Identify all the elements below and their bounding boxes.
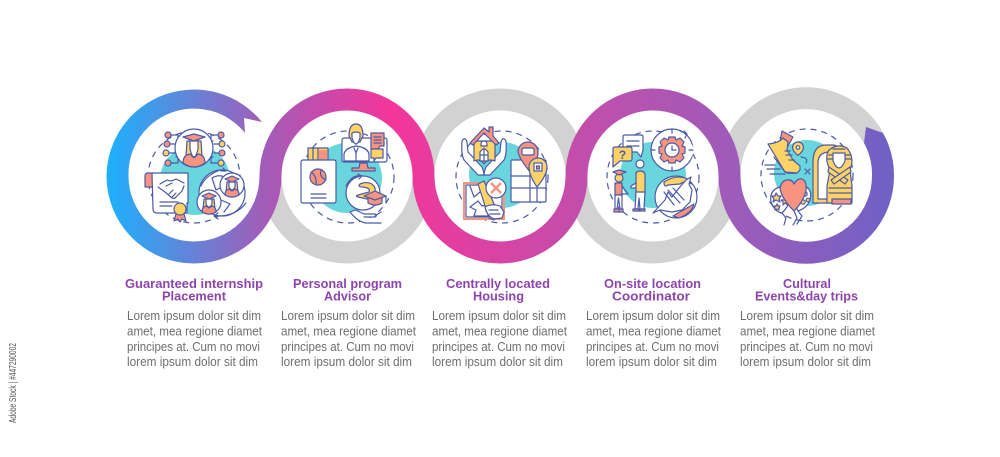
step 2 text: lorem ipsum dolor sit dim [281, 355, 412, 369]
step 3 heading: Centrally located [446, 277, 550, 291]
step 5 heading [755, 277, 858, 304]
step 1 heading [125, 277, 263, 304]
step 3 text: principes at. Cum no movi [432, 340, 565, 354]
step 5 text: lorem ipsum dolor sit dim [740, 355, 871, 369]
step 2 heading [293, 277, 402, 304]
step 2 heading: Advisor [324, 290, 371, 304]
icon: internship placement [145, 129, 246, 223]
step 4 text: Lorem ipsum dolor sit dim [586, 309, 720, 323]
step 4 text [586, 309, 721, 369]
step 5 text: Lorem ipsum dolor sit dim [740, 309, 874, 323]
gradient ribbon with arrow ends [106, 90, 894, 253]
icon: cultural events and day trips [761, 129, 853, 225]
step 4 heading [604, 277, 701, 304]
step 3 text: Lorem ipsum dolor sit dim [432, 309, 566, 323]
step 5 heading: Events&day trips [755, 290, 858, 304]
step 3 heading [446, 277, 550, 304]
step 4 heading: Coordinator [612, 290, 690, 304]
step 3 text: amet, mea regione diamet [432, 324, 567, 338]
step 2 heading: Personal program [293, 277, 402, 291]
icon: program advisor [301, 124, 394, 223]
step 2 text [281, 309, 416, 369]
step 4 text: principes at. Cum no movi [586, 340, 719, 354]
step 2 text: amet, mea regione diamet [281, 324, 416, 338]
step 1 heading: Placement [162, 290, 227, 304]
step 3 heading: Housing [473, 290, 524, 304]
step 1 text: amet, mea regione diamet [127, 324, 262, 338]
step 2 text: Lorem ipsum dolor sit dim [281, 309, 415, 323]
icon: on-site location coordinator: ? [619, 148, 626, 162]
step 5 text [740, 309, 875, 369]
step 5 text: principes at. Cum no movi [740, 340, 873, 354]
step 1 heading: Guaranteed internship [125, 277, 263, 291]
step 4 heading: On-site location [604, 277, 701, 291]
gray ring segments [270, 98, 874, 253]
step 3 text [432, 309, 567, 369]
icon: centrally located housing [456, 127, 548, 223]
step 5 text: amet, mea regione diamet [740, 324, 875, 338]
stock image credit: Adobe Stock | #447290002 [8, 343, 19, 423]
step 1 text: Lorem ipsum dolor sit dim [127, 309, 261, 323]
step 4 text: amet, mea regione diamet [586, 324, 721, 338]
step 1 text: principes at. Cum no movi [127, 340, 260, 354]
step 4 text: lorem ipsum dolor sit dim [586, 355, 717, 369]
icon: on-site location coordinator [607, 129, 699, 223]
step 5 heading: Cultural [783, 277, 831, 291]
step 2 text: principes at. Cum no movi [281, 340, 414, 354]
step 3 text: lorem ipsum dolor sit dim [432, 355, 563, 369]
step 1 text: lorem ipsum dolor sit dim [127, 355, 258, 369]
step 1 text [127, 309, 262, 369]
